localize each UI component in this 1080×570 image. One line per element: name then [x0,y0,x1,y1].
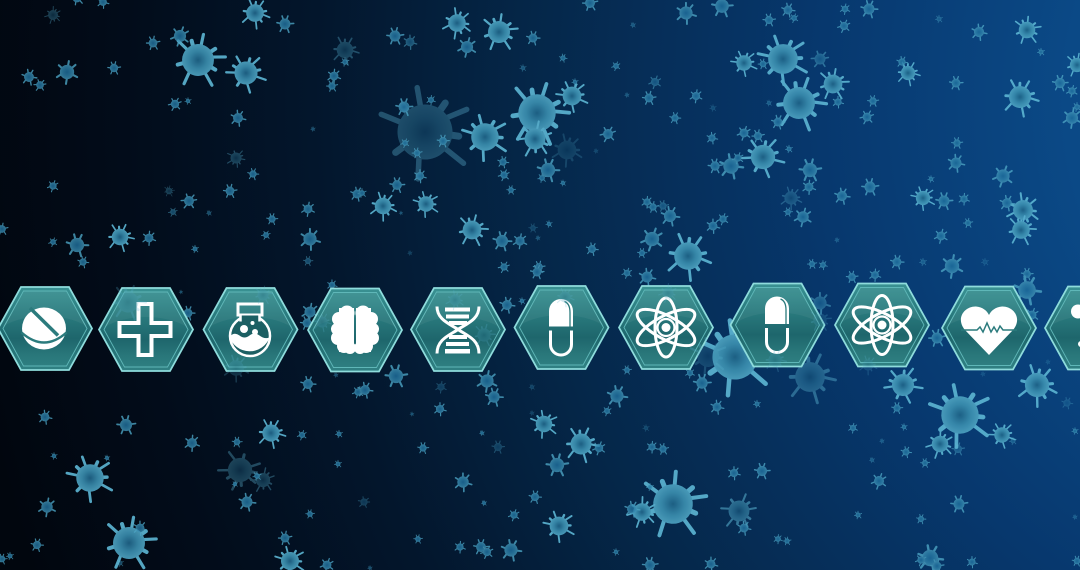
hexagon: heart with pulse [942,286,1036,370]
icon: atom second [848,296,916,354]
hexagon: medical cross [99,288,193,371]
hexagon: atom [619,286,713,369]
hexagon: flask [204,288,298,371]
hexagon: capsule [514,286,608,369]
icon: flask [230,304,270,356]
hexagon: capsule second [730,284,824,366]
row of hexagon medical icons [0,284,1080,372]
hexagon: partial icon at right edge [1045,286,1080,370]
icon: DNA helix [437,306,479,354]
icon: atom [632,298,700,357]
icon: brain [331,306,379,354]
icon: capsule second [765,296,789,352]
icon: capsule [549,299,573,355]
hexagon: tablet [0,287,92,370]
icon: medical cross [120,304,170,355]
faint viruses drifting over the icons [108,281,881,386]
hexagon: DNA helix [411,288,505,371]
icon: heart with pulse [961,306,1017,355]
hexagon: atom second [835,284,929,366]
icon: partial figure [1071,304,1080,347]
icon: tablet [22,308,66,350]
hexagon: brain [308,288,402,372]
